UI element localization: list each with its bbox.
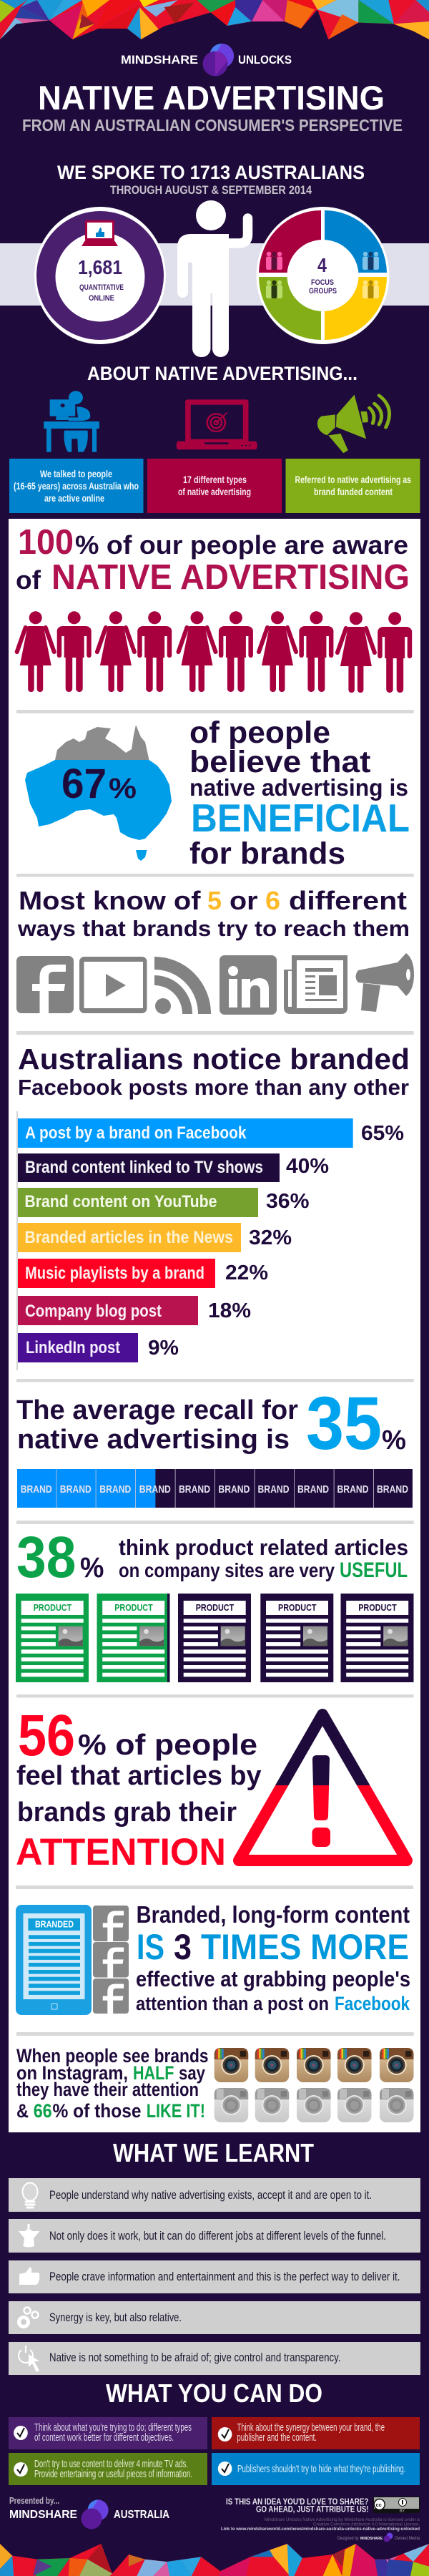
panel: action blue	[212, 2453, 420, 2485]
text block: Instagram: HALF	[133, 2062, 174, 2084]
text block: beneficial for brands: BENEFICIAL	[191, 796, 410, 840]
bar: News 32%	[18, 1223, 292, 1252]
panel: focus groups circle: 4	[317, 254, 327, 276]
text block: beneficial for brands: for brands	[189, 836, 345, 871]
panel: learning 2	[9, 2219, 420, 2253]
icon: rss	[154, 963, 204, 1014]
panel: crimson info box: of native advertising	[178, 486, 251, 497]
bar: News 32%: Branded articles in the News	[24, 1228, 233, 1247]
heading: Australians notice branded: Facebook posts more than any other	[18, 1075, 409, 1100]
icon: linkedin	[220, 955, 277, 1015]
panel: quantitative online circle: ONLINE	[89, 294, 114, 303]
text block: Instagram: they have their attention	[16, 2079, 199, 2100]
bar: Blog 18%: 18%	[208, 1299, 251, 1322]
heading: about native advertising: ABOUT NATIVE ADVERTISING...	[87, 363, 358, 384]
icon: check	[218, 2462, 232, 2476]
panel: focus groups circle: FOCUS	[311, 278, 334, 287]
bar chart	[17, 1111, 404, 1370]
heading: average recall 35%	[16, 1382, 406, 1465]
text block: Instagram: &	[16, 2100, 29, 2122]
text block: designed by: Owned Media	[395, 2537, 420, 2541]
text block: 3 times more	[136, 1901, 410, 2014]
text block: beneficial for brands: believe that	[189, 745, 370, 779]
text block: 3 times more: attention than a post on	[136, 1993, 329, 2014]
text block: licence	[221, 2517, 420, 2532]
heading: 38% useful: think product related articles	[119, 1535, 408, 1560]
panel: action red: publisher and the content.	[237, 2432, 317, 2444]
text block: 3 times more: Facebook	[335, 1993, 410, 2014]
icon: newspaper	[284, 955, 347, 1014]
text block: attribution	[226, 2497, 369, 2514]
icon: funnel	[19, 2224, 40, 2247]
chart: ten brand cells, 35% filled: BRAND	[377, 1484, 408, 1496]
footer logo: Mindshare Australia: Presented by...	[9, 2495, 59, 2506]
icon: Australia map 67%: %	[109, 773, 137, 804]
chart: ten brand cells, 35% filled: BRAND	[179, 1484, 210, 1496]
icon: gears	[19, 2307, 39, 2327]
heading: 100% aware: 100	[18, 523, 74, 562]
bar: LinkedIn 9%: 9%	[148, 1337, 179, 1360]
heading: 5 or 6 ways: 5	[207, 886, 222, 915]
bar: News 32%: 32%	[249, 1226, 292, 1249]
panel: crimson info box: 17 different types	[183, 474, 247, 485]
icon: creative commons badge: cc	[376, 2502, 382, 2508]
heading: 38% useful: on company sites are very	[119, 1559, 335, 1581]
icon: check	[218, 2427, 232, 2441]
heading: average recall 35%: %	[382, 1425, 406, 1455]
icon: target	[207, 413, 227, 431]
icon: grey megaphone	[356, 953, 414, 1012]
icons: Instagram grid	[214, 2048, 413, 2122]
text block: beneficial for brands: of people	[189, 716, 330, 750]
panel: blue info box	[9, 459, 143, 513]
icon row: ten people	[17, 611, 412, 693]
icon: product article 3: PRODUCT	[196, 1603, 235, 1613]
icon: creative commons badge	[373, 2497, 420, 2513]
bar: YouTube 36%: Brand content on YouTube	[24, 1192, 217, 1211]
text block: Instagram: % of those	[53, 2100, 142, 2122]
panel: action purple	[9, 2417, 207, 2449]
heading: 38% useful: 38	[16, 1525, 76, 1590]
footer logo: Mindshare Australia	[9, 2495, 169, 2529]
heading: 5 or 6 ways: or	[230, 886, 257, 915]
text block: 56% attention	[16, 1703, 262, 1873]
text block: Instagram	[16, 2045, 209, 2122]
text block: licence: Mindshare Unlocks Native Advertising by Mindshare Australia is licensed under a	[265, 2517, 420, 2522]
panel: quantitative online circle: QUANTITATIVE	[79, 283, 124, 292]
panel: learning 3	[9, 2260, 420, 2293]
icon: video player	[79, 957, 147, 1013]
icon: tablet branded	[16, 1905, 92, 2015]
icon: product article 5	[340, 1594, 413, 1682]
footer logo: Mindshare Australia: MINDSHARE	[9, 2509, 77, 2521]
panel: action green	[9, 2453, 207, 2485]
heading: 5 or 6 ways: ways that brands try to reach them	[17, 916, 410, 941]
panel: learning 4	[9, 2301, 420, 2334]
icon: Australia map 67%: 67	[61, 761, 107, 807]
logo: Mindshare Unlocks: UNLOCKS	[238, 53, 292, 67]
text block: 56% attention: 56	[18, 1703, 75, 1768]
chart: ten brand cells, 35% filled	[17, 1469, 413, 1508]
heading: 5 or 6 ways: 6	[265, 886, 280, 915]
text block: Instagram: LIKE IT!	[147, 2100, 205, 2122]
icon: standing person	[177, 200, 247, 357]
heading: 100% aware: of	[16, 565, 41, 595]
heading: average recall 35%: The average recall for	[16, 1395, 298, 1425]
icon: power button and cursor	[19, 2346, 40, 2372]
heading: 38% useful: %	[80, 1552, 104, 1584]
icon: check	[14, 2426, 28, 2440]
chart: ten brand cells, 35% filled: BRAND	[60, 1484, 92, 1496]
icon: laptop with thumb	[82, 220, 118, 246]
icon: three facebook squares	[93, 1906, 129, 2014]
panel: quantitative online circle: 1,681	[78, 256, 122, 278]
footer polygon banner	[0, 2542, 429, 2576]
panel: action purple: Think about what you're trying to do; different types	[34, 2422, 192, 2434]
chart: ten brand cells, 35% filled: BRAND	[21, 1484, 52, 1496]
heading: 100% aware	[16, 523, 410, 597]
panel: green info box	[286, 459, 420, 513]
subheading: dates: THROUGH AUGUST & SEPTEMBER 2014	[110, 184, 312, 197]
chart: ten brand cells, 35% filled: BRAND	[139, 1484, 171, 1496]
heading: what we learnt: WHAT WE LEARNT	[113, 2138, 314, 2167]
text block: 56% attention: feel that articles by	[16, 1761, 262, 1791]
heading: 100% aware: NATIVE ADVERTISING	[51, 558, 410, 597]
panel: learning 1	[9, 2178, 420, 2212]
title: NATIVE ADVERTISING	[38, 79, 385, 117]
header polygon banner	[0, 0, 429, 41]
text block: 56% attention: ATTENTION	[16, 1831, 226, 1873]
panel: blue info box: We talked to people	[40, 468, 112, 479]
icon: green megaphone	[317, 395, 390, 453]
icon: person at desk	[44, 391, 99, 452]
icon: product article 1	[16, 1594, 89, 1682]
icon: product article 5: PRODUCT	[358, 1603, 397, 1613]
panel: learning 5: Native is not something to be afraid of; give control and transparency.	[49, 2351, 340, 2364]
bar: Facebook 65%: 65%	[361, 1122, 404, 1145]
heading: we spoke to: WE SPOKE TO 1713 AUSTRALIANS	[57, 162, 365, 183]
icon: product article 2	[97, 1594, 170, 1682]
bar: Music 22%: 22%	[225, 1262, 268, 1284]
logo: Mindshare Unlocks	[121, 44, 292, 76]
icon: product article 2: PRODUCT	[114, 1603, 153, 1613]
heading: Australians notice branded	[18, 1043, 410, 1100]
bar: LinkedIn 9%: LinkedIn post	[26, 1338, 120, 1357]
chart: ten brand cells, 35% filled: BRAND	[297, 1484, 329, 1496]
footer logo: Mindshare Australia: AUSTRALIA	[114, 2509, 169, 2521]
bar: TV shows 40%: 40%	[286, 1155, 329, 1178]
panel: action red	[212, 2417, 420, 2449]
panel: action green: Provide entertaining or useful pieces of information.	[34, 2469, 192, 2480]
bar: Music 22%	[18, 1259, 268, 1288]
text block: Instagram: When people see brands	[16, 2045, 209, 2067]
panel: blue info box: are active online	[44, 492, 104, 504]
icon: check	[14, 2462, 28, 2477]
chart: ten brand cells, 35% filled: BRAND	[218, 1484, 250, 1496]
text block: attribution: GO AHEAD, JUST ATTRIBUTE US!	[256, 2504, 369, 2514]
icon: laptop with target	[177, 399, 257, 449]
text block: beneficial for brands: native advertising is	[189, 774, 408, 801]
panel: quantitative online circle	[34, 207, 166, 344]
heading: 5 or 6 ways: Most know of	[19, 886, 202, 915]
text block: 3 times more: IS	[137, 1927, 164, 1967]
bar: Facebook 65%	[18, 1118, 404, 1148]
bar: Music 22%: Music playlists by a brand	[25, 1264, 204, 1283]
heading: 38% useful: USEFUL	[340, 1558, 408, 1582]
bar: Blog 18%	[18, 1296, 251, 1325]
chart: ten brand cells, 35% filled: BRAND	[257, 1484, 289, 1496]
heading: 5 or 6 ways: different	[289, 886, 407, 915]
text block: Instagram: say	[179, 2062, 205, 2084]
heading: 38% useful	[16, 1525, 408, 1590]
text block: Instagram: 66	[34, 2100, 52, 2122]
icon: product article 4: PRODUCT	[278, 1603, 317, 1613]
icon: product article 4	[260, 1594, 333, 1682]
bar: YouTube 36%: 36%	[266, 1190, 310, 1213]
panel: blue info box: (16-65 years) across Australia who	[14, 480, 139, 492]
text block: designed by: MINDSHARE	[360, 2537, 383, 2541]
icon: facebook	[16, 956, 74, 1013]
bar: TV shows 40%: Brand content linked to TV shows	[25, 1158, 263, 1177]
panel: action purple: of content work better for different objectives.	[34, 2432, 174, 2444]
bar: YouTube 36%	[18, 1188, 310, 1217]
panel: focus groups circle	[256, 207, 389, 344]
chart: four coloured quadrants	[259, 210, 387, 340]
icon: product article 1: PRODUCT	[34, 1603, 72, 1613]
text block: licence: Creative Commons Attribution 4.0 International License.	[313, 2522, 420, 2527]
icon: thumbs up	[19, 2267, 39, 2285]
panel: green info box: brand funded content	[314, 486, 393, 497]
text block: 56% attention: brands grab their	[17, 1797, 237, 1828]
text block: Instagram: on Instagram,	[16, 2062, 128, 2084]
text block: 3 times more: TIMES MORE	[201, 1927, 409, 1967]
text block: beneficial for brands	[189, 716, 410, 871]
heading: what you can do: WHAT YOU CAN DO	[106, 2379, 322, 2408]
panel: learning 5	[9, 2342, 420, 2375]
panel: action green: Don't try to use content to deliver 4 minute TV ads.	[34, 2459, 188, 2470]
heading: 5 or 6 ways	[17, 886, 410, 941]
text block: attribution: IS THIS AN IDEA YOU'D LOVE TO SHARE?	[226, 2497, 369, 2507]
heading: 100% aware: % of our people are aware	[75, 530, 408, 560]
chart: ten brand cells, 35% filled: BRAND	[99, 1484, 131, 1496]
panel: crimson info box	[147, 459, 282, 513]
text block: 3 times more: 3	[174, 1927, 192, 1967]
icon: creative commons badge: BY	[400, 2509, 405, 2513]
text block: designed by	[337, 2533, 420, 2542]
text block: 56% attention: % of people	[78, 1728, 257, 1761]
bar: Facebook 65%: A post by a brand on Facebook	[25, 1123, 247, 1143]
light band behind circles	[0, 243, 429, 306]
chart: ten brand cells, 35% filled: BRAND	[337, 1484, 369, 1496]
bar: TV shows 40%	[18, 1153, 329, 1182]
icon: light bulb	[23, 2182, 37, 2207]
panel: focus groups circle: GROUPS	[309, 287, 337, 296]
heading: average recall 35%: 35	[306, 1382, 382, 1465]
heading: average recall 35%: native advertising is	[17, 1425, 290, 1455]
icon: product article 3	[178, 1594, 251, 1682]
logo: Mindshare Unlocks: MINDSHARE	[121, 53, 198, 67]
bar: LinkedIn 9%	[18, 1333, 179, 1362]
panel: white content panel	[9, 519, 420, 2132]
icon: groups of people	[266, 252, 379, 298]
panel: learning 4: Synergy is key, but also relative.	[49, 2311, 182, 2324]
heading: Australians notice branded: Australians notice branded	[18, 1043, 410, 1075]
icon: warning triangle	[239, 1714, 407, 1860]
text block: designed by: Designed by	[337, 2537, 359, 2541]
icon: Australia map 67%	[25, 725, 172, 861]
bar: Blog 18%: Company blog post	[25, 1302, 162, 1321]
icon: tablet branded: BRANDED	[35, 1919, 74, 1929]
